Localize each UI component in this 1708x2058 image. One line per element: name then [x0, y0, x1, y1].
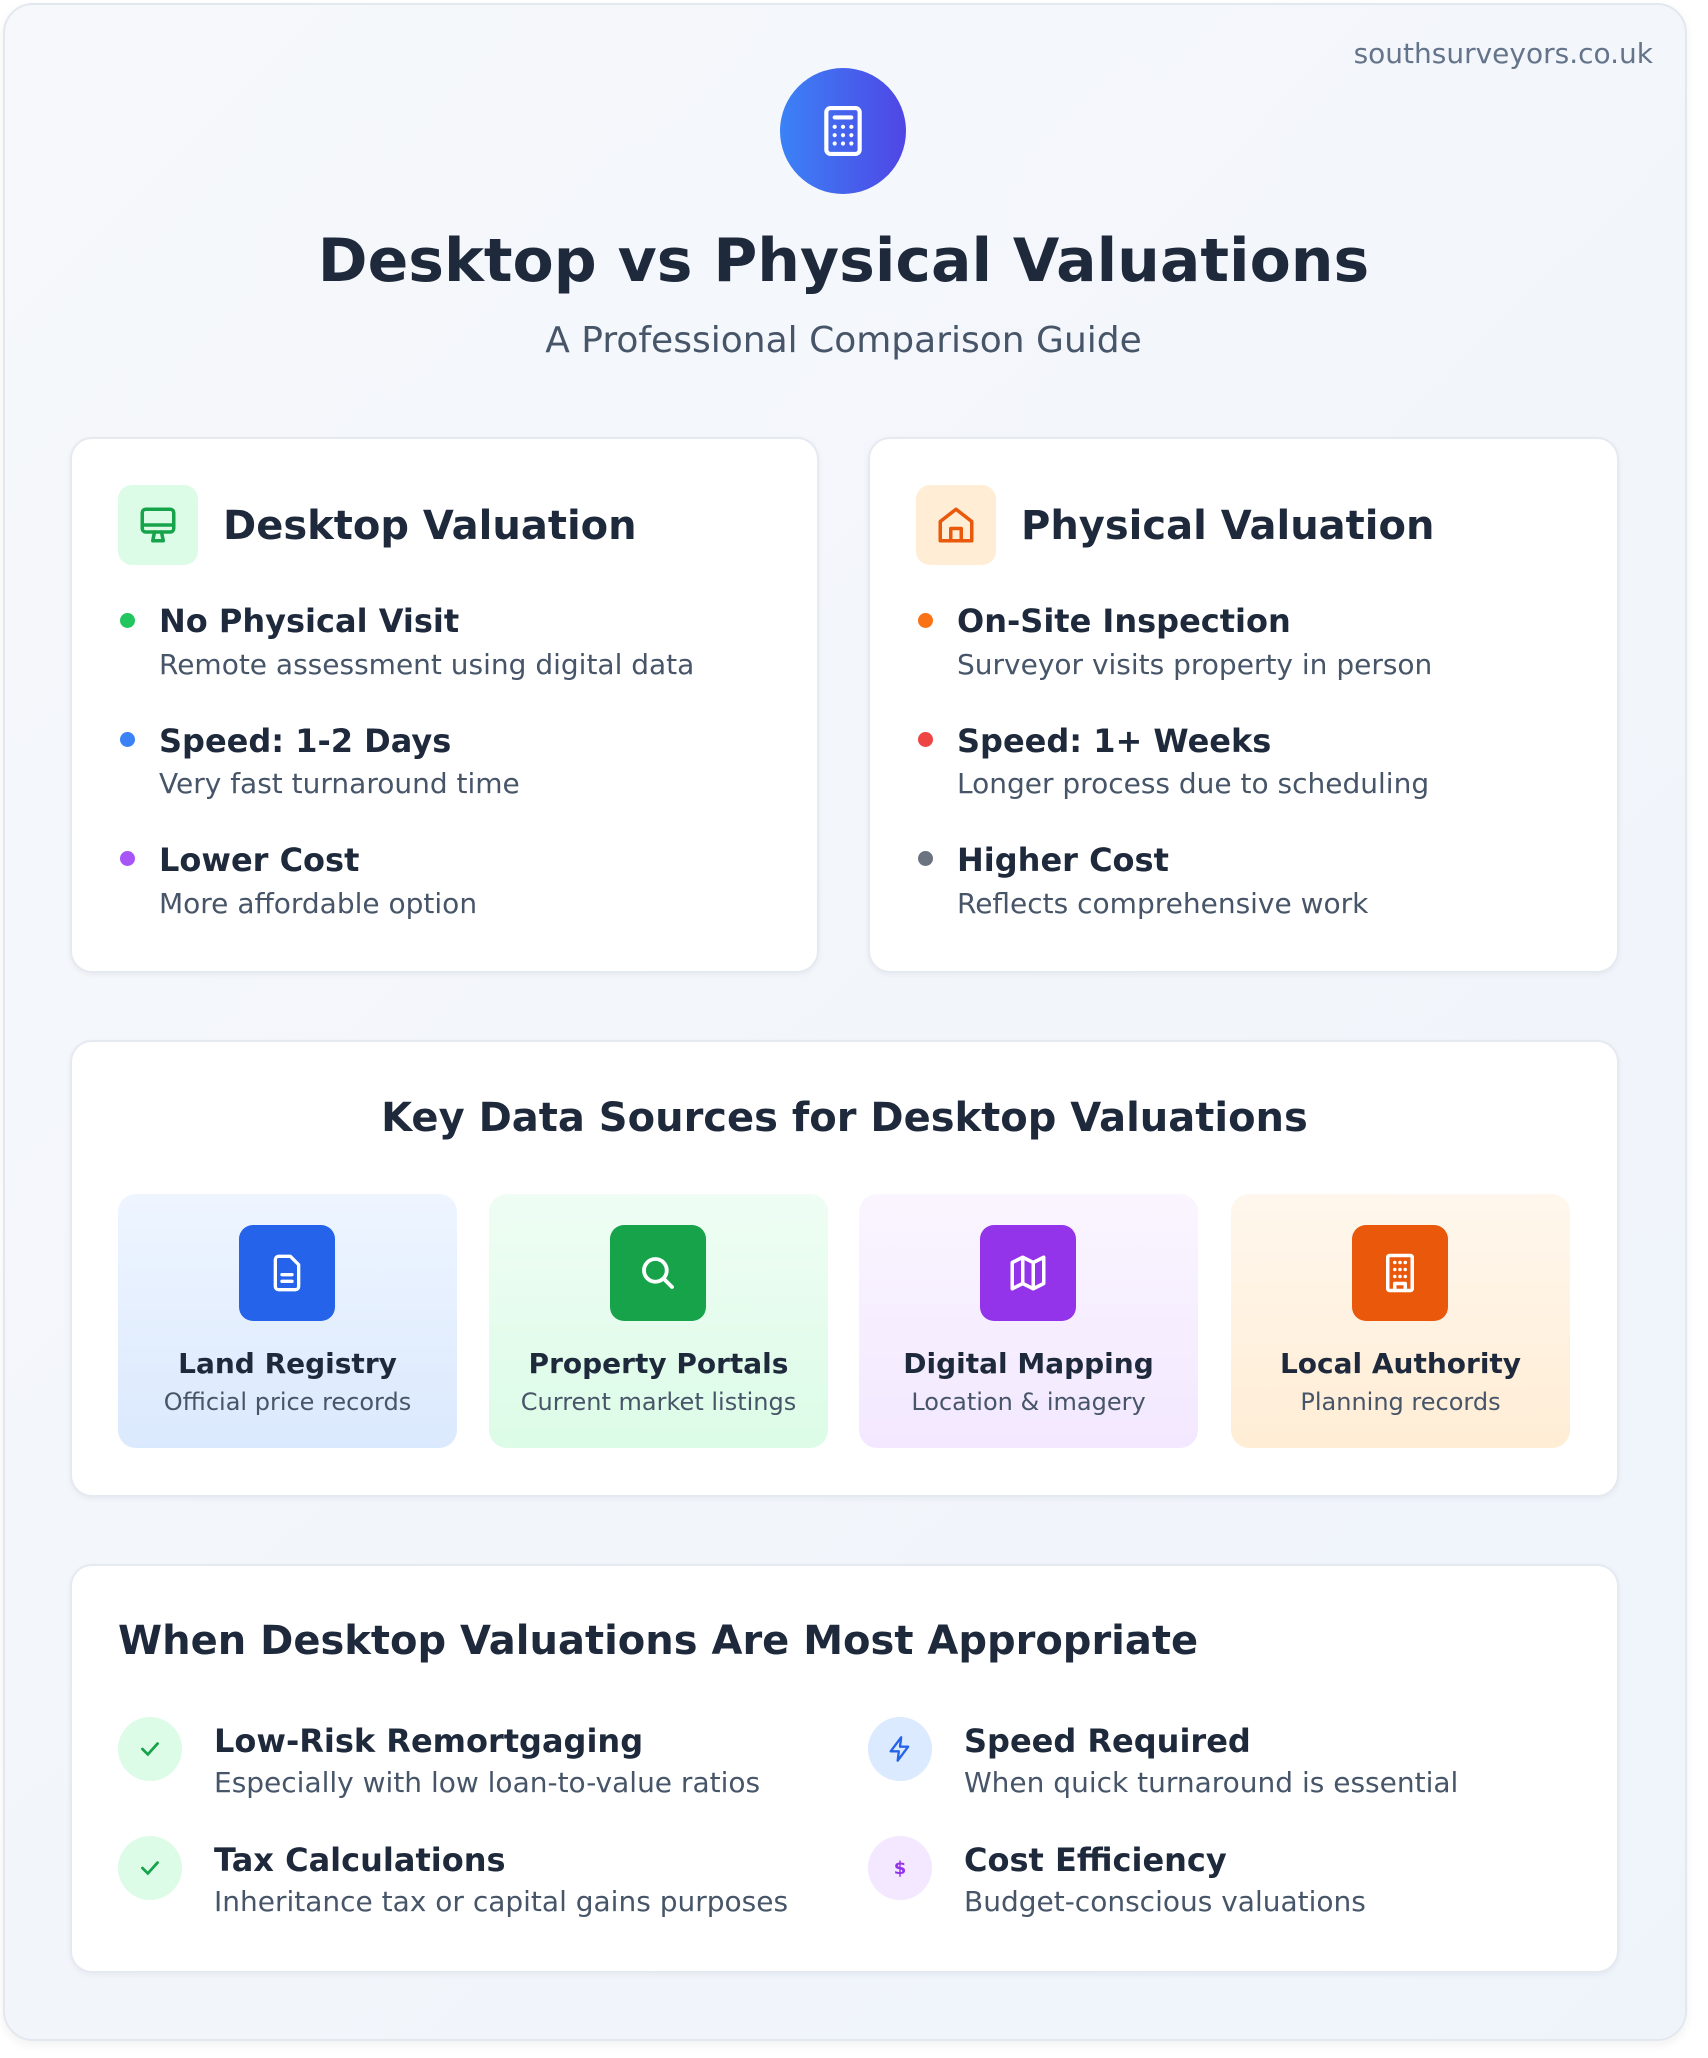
bullets: Surveyor visits property in person — [957, 648, 1432, 681]
item: low-risk remortgaging: Low-Risk Remortgaging — [214, 1722, 643, 1760]
bullets: Speed: 1-2 Days — [159, 722, 451, 760]
card: property portals: Property Portals — [529, 1347, 788, 1380]
icon: house — [916, 485, 996, 565]
card: digital mapping — [859, 1194, 1198, 1448]
card: land registry: Land Registry — [178, 1347, 397, 1380]
bullets: Remote assessment using digital data — [159, 648, 694, 681]
bullets — [120, 602, 694, 920]
item: cost efficiency: Budget-conscious valuations — [964, 1885, 1366, 1918]
bullets — [918, 602, 1432, 920]
bullets: Speed: 1+ Weeks — [957, 722, 1271, 760]
card: local authority — [1231, 1194, 1570, 1448]
title: Desktop vs Physical Valuations — [318, 226, 1369, 296]
icon: calculator — [780, 68, 906, 194]
item: cost efficiency: Cost Efficiency — [964, 1841, 1227, 1879]
bullets: Longer process due to scheduling — [957, 767, 1429, 800]
item: tax calculations — [118, 1836, 788, 1918]
item: low-risk remortgaging — [118, 1717, 760, 1799]
heading: when appropriate: When Desktop Valuations Are Most Appropriate — [118, 1618, 1198, 1664]
item: speed required: Speed Required — [964, 1722, 1251, 1760]
bullets: Reflects comprehensive work — [957, 887, 1368, 920]
bullets: Very fast turnaround time — [159, 767, 520, 800]
icon: monitor — [118, 485, 198, 565]
bullets: More affordable option — [159, 887, 477, 920]
card: property portals: Current market listings — [521, 1388, 796, 1416]
item: speed required: When quick turnaround is essential — [964, 1766, 1458, 1799]
item: cost efficiency: $ — [894, 1858, 906, 1878]
item: tax calculations: Inheritance tax or capital gains purposes — [214, 1885, 788, 1918]
item: cost efficiency — [868, 1836, 1366, 1918]
panel: physical valuation — [868, 437, 1619, 973]
card: digital mapping: Location & imagery — [911, 1388, 1146, 1416]
domain text: southsurveyors.co.uk — [1354, 37, 1653, 70]
item: speed required — [868, 1717, 1458, 1799]
card: land registry — [118, 1194, 457, 1448]
item: tax calculations: Tax Calculations — [214, 1841, 506, 1879]
heading: Physical Valuation — [1021, 503, 1434, 549]
heading: data sources: Key Data Sources for Desktop Valuations — [381, 1095, 1308, 1141]
bullets: Higher Cost — [957, 841, 1169, 879]
card: local authority: Local Authority — [1280, 1347, 1521, 1380]
panel: when appropriate — [70, 1564, 1619, 1973]
panel: desktop valuation — [70, 437, 819, 973]
card: land registry: Official price records — [164, 1388, 411, 1416]
subtitle: A Professional Comparison Guide — [545, 320, 1142, 361]
item: low-risk remortgaging: Especially with low loan-to-value ratios — [214, 1766, 760, 1799]
panel: data sources — [70, 1040, 1619, 1497]
card: digital mapping: Digital Mapping — [903, 1347, 1154, 1380]
card: local authority: Planning records — [1300, 1388, 1501, 1416]
heading: Desktop Valuation — [223, 503, 637, 549]
bullets: No Physical Visit — [159, 602, 459, 640]
bullets: On-Site Inspection — [957, 602, 1291, 640]
card: property portals — [489, 1194, 828, 1448]
bullets: Lower Cost — [159, 841, 359, 879]
